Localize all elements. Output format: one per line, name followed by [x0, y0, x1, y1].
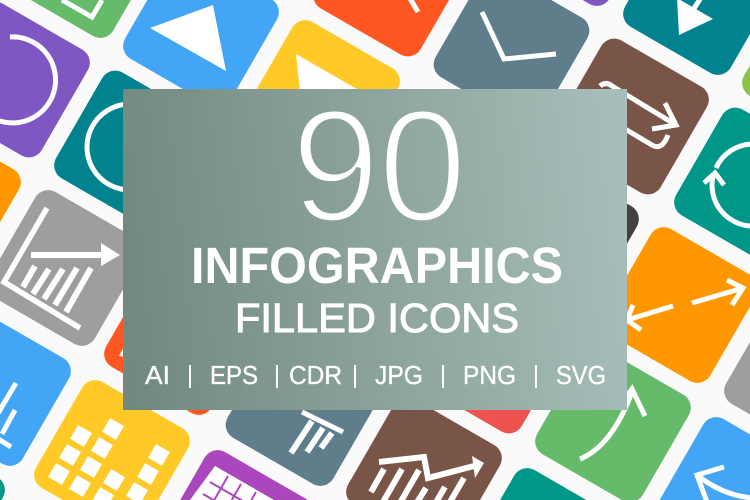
tile: brown chart with arrow: [346, 410, 502, 500]
tile: brown transfer arrows: [576, 38, 709, 194]
tile: blue left bars: [0, 322, 71, 466]
file formats row: AI: [145, 360, 170, 390]
tile: yellow grid squares: [34, 380, 190, 500]
tile: orange-red behind panel: [104, 317, 210, 415]
tile: blue bottom-right arrow: [660, 417, 750, 500]
tile: teal top-right arrow: [623, 0, 750, 75]
tile: yellow triangle: [256, 20, 400, 89]
subheading: filled icons: FILLED ICONS: [235, 295, 519, 341]
tile: orange double arrow: [627, 227, 750, 383]
tile: green curve arrow: [535, 362, 691, 500]
tile: purple table: [180, 450, 308, 500]
tile: teal circle: [54, 70, 151, 214]
file formats row: [145, 360, 606, 390]
tile: orange left: [0, 162, 21, 222]
file formats row: SVG: [556, 360, 606, 390]
tile: teal bottom-left corner: [0, 479, 5, 500]
file formats row: CDR: [289, 360, 342, 390]
tile: orange-red top: [314, 0, 449, 56]
tile: gray bar chart: [0, 190, 123, 346]
tile: blue triangle: [123, 0, 279, 89]
tile: dark gray: [627, 204, 639, 244]
title panel: [123, 76, 627, 410]
tile: lime right: [742, 65, 750, 96]
tile: green top check: [31, 0, 131, 38]
file formats row: JPG: [375, 360, 423, 390]
file formats row: PNG: [463, 360, 516, 390]
heading: infographics: INFOGRAPHICS: [191, 237, 563, 294]
tile: hidden purple behind panel: [359, 84, 525, 250]
tile: slate bottom bars: [226, 410, 373, 486]
tile: small purple top: [582, 0, 609, 6]
heading number: 90: 90: [291, 76, 465, 255]
tile: gray right: [724, 342, 750, 414]
file formats row: EPS: [210, 360, 258, 390]
tile: teal-green cycle: [674, 108, 750, 255]
tile: slate check: [434, 0, 590, 89]
tile: purple circle: [0, 2, 90, 158]
tile: teal bottom: [500, 468, 586, 500]
tile: red: [464, 410, 531, 434]
